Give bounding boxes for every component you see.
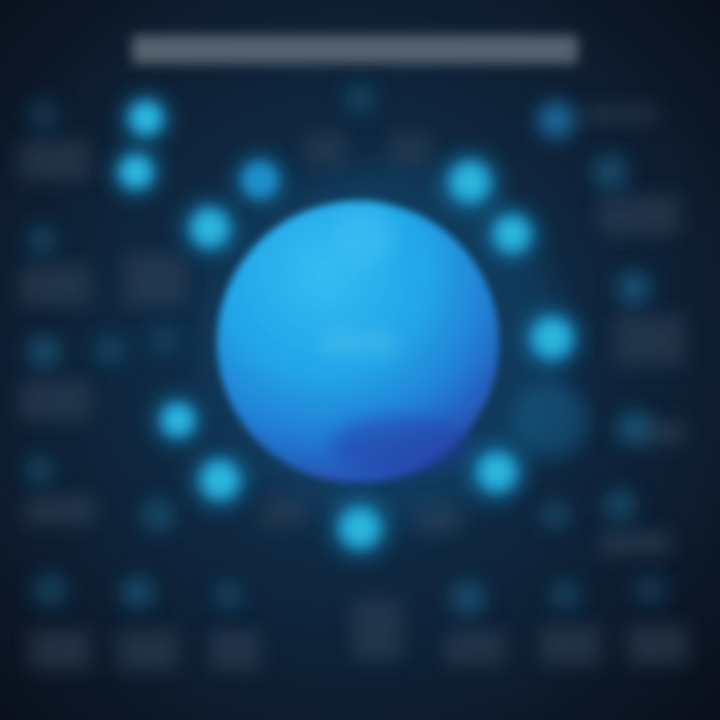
orb centre label (blurred) <box>320 332 394 354</box>
orb glow and halo panel <box>205 165 565 525</box>
orb highlight <box>335 205 395 265</box>
dim nodes <box>25 83 665 615</box>
orb lower shadow <box>330 417 470 473</box>
blurred text blocks <box>20 106 688 670</box>
title bar (illegible blurred heading) <box>132 35 578 64</box>
bright nodes <box>110 92 582 559</box>
central orb <box>217 201 499 483</box>
